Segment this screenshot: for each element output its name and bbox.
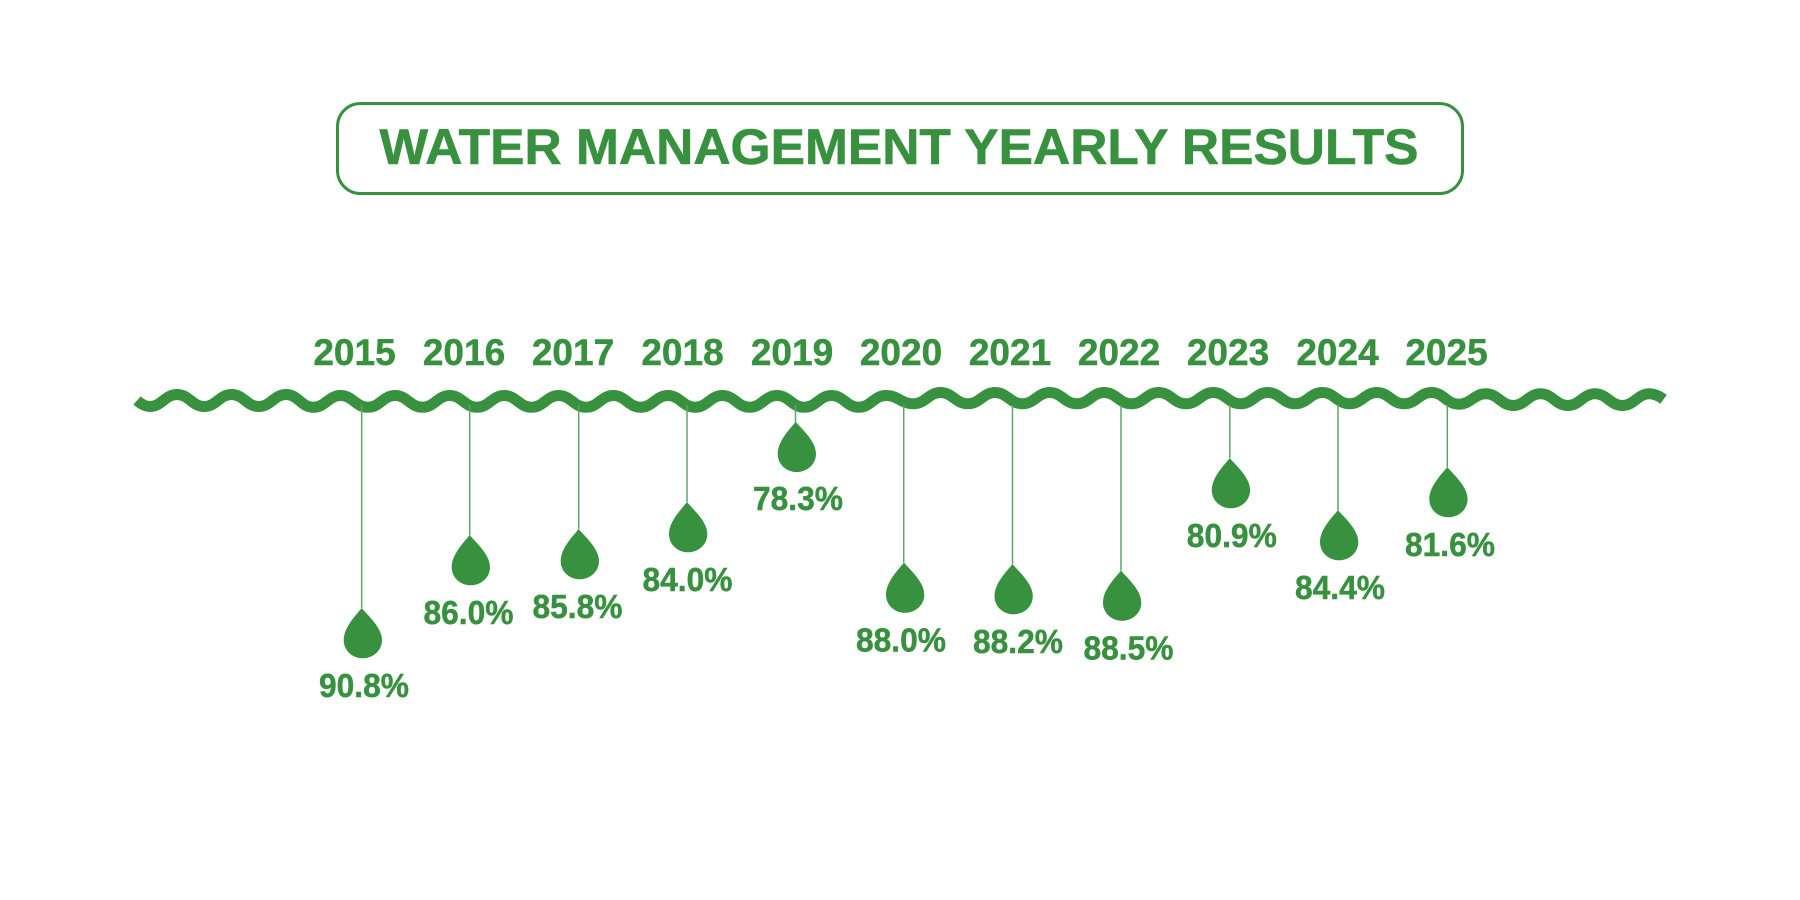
drop 2018 xyxy=(642,405,732,598)
year labels: 2016 xyxy=(423,332,505,373)
year labels xyxy=(313,332,1488,373)
drop 2024: 84.4% xyxy=(1295,569,1385,606)
year labels: 2018 xyxy=(641,332,724,373)
drop 2025 xyxy=(1405,405,1495,563)
drop 2024 xyxy=(1295,405,1385,606)
drop 2018: 84.0% xyxy=(642,561,732,598)
drop 2016: 86.0% xyxy=(424,594,514,631)
year labels: 2020 xyxy=(860,332,942,373)
drop 2021: 88.2% xyxy=(973,623,1063,660)
year labels: 2022 xyxy=(1078,332,1160,373)
title frame xyxy=(338,104,1462,194)
drop 2017: 85.8% xyxy=(532,588,622,625)
wave line xyxy=(137,392,1664,407)
drop 2023 xyxy=(1187,405,1277,554)
drop 2016 xyxy=(424,405,514,631)
year labels: 2024 xyxy=(1296,332,1379,373)
drop 2020: 88.0% xyxy=(856,622,946,658)
drop 2023: 80.9% xyxy=(1187,517,1277,554)
year labels: 2015 xyxy=(313,332,396,373)
title xyxy=(338,104,1462,194)
drop 2025: 81.6% xyxy=(1405,526,1495,563)
drop 2022: 88.5% xyxy=(1084,630,1174,666)
title text: WATER MANAGEMENT YEARLY RESULTS xyxy=(380,119,1418,175)
drop 2019 xyxy=(753,405,843,517)
year labels: 2025 xyxy=(1405,332,1488,373)
drop 2019: 78.3% xyxy=(753,480,843,517)
drop 2021 xyxy=(973,405,1063,660)
year labels: 2017 xyxy=(532,332,614,373)
drop 2020 xyxy=(856,405,946,658)
drop 2022 xyxy=(1084,405,1174,666)
year labels: 2023 xyxy=(1187,332,1269,373)
year labels: 2019 xyxy=(751,332,833,373)
drop 2015: 90.8% xyxy=(319,667,409,704)
drop 2017 xyxy=(532,405,622,625)
drop 2015 xyxy=(319,405,409,704)
year labels: 2021 xyxy=(969,332,1051,373)
